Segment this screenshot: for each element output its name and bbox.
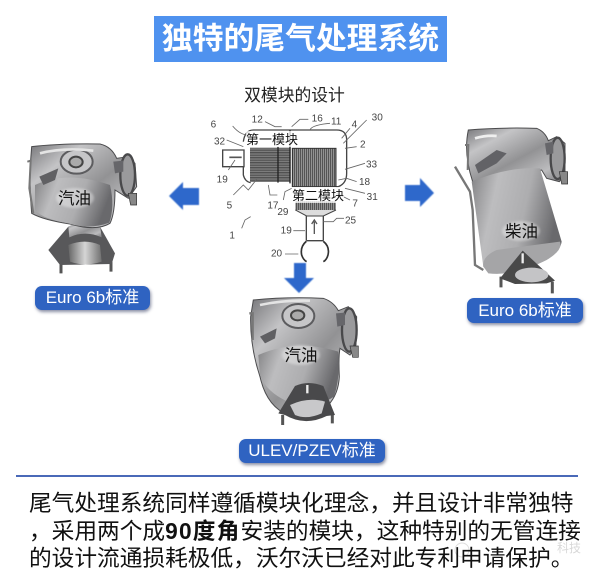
description text: 的设计流通损耗极低，沃尔沃已经对此专利申请保护。 <box>29 545 574 571</box>
arrow: right <box>405 178 434 207</box>
patent diagram: dual module design: 20 <box>271 249 283 260</box>
label: gasoline, middle: 汽油 <box>284 346 318 365</box>
patent diagram: dual module design: 16 <box>312 113 323 124</box>
patent diagram: dual module design: 33 <box>366 159 378 170</box>
patent diagram: dual module design: 12 <box>252 114 263 125</box>
patent diagram: dual module design: 11 <box>331 117 342 128</box>
watermark: 科技 <box>557 541 581 555</box>
description text: ，采用两个成90度角安装的模块，这种特别的无管连接 <box>29 518 581 544</box>
patent diagram: dual module design: 17 <box>267 200 279 211</box>
patent diagram: dual module design: 29 <box>277 207 289 218</box>
standard pill: right Euro 6b <box>467 298 583 323</box>
patent diagram: dual module design: 19 <box>281 225 292 236</box>
description text: 尾气处理系统同样遵循模块化理念，并且设计非常独特 <box>29 490 574 516</box>
label: diesel: 柴油 <box>505 222 538 241</box>
patent diagram: dual module design: 18 <box>359 177 371 188</box>
patent diagram: dual module design: 6 <box>211 120 217 131</box>
patent diagram: dual module design <box>211 112 383 262</box>
patent diagram: dual module design: 30 <box>372 112 383 123</box>
patent diagram: dual module design: 1 <box>229 231 235 242</box>
patent diagram: dual module design: 25 <box>345 216 357 227</box>
patent diagram: dual module design: 31 <box>367 192 378 203</box>
standard pill: right Euro 6b: Euro 6b标准 <box>478 301 572 320</box>
standard pill: left Euro 6b <box>35 286 150 310</box>
label: gasoline, left: 汽油 <box>58 189 91 208</box>
patent diagram: dual module design: 19 <box>217 175 228 186</box>
arrow: down <box>284 263 314 293</box>
standard pill: left Euro 6b: Euro 6b标准 <box>46 288 139 307</box>
standard pill: ULEV/PZEV: ULEV/PZEV标准 <box>248 441 376 460</box>
label: second module: 第二模块 <box>292 188 344 203</box>
watermark <box>455 541 581 557</box>
patent diagram: dual module design: 2 <box>360 140 366 151</box>
patent diagram: dual module design: 7 <box>352 199 358 210</box>
standard pill: ULEV/PZEV <box>239 439 385 463</box>
patent diagram: dual module design: 32 <box>214 136 226 147</box>
label: first module: 第一模块 <box>246 132 298 147</box>
description text <box>29 490 581 571</box>
icon: right diesel converter <box>455 128 568 293</box>
arrow: left <box>169 182 199 210</box>
title banner: 独特的尾气处理系统 <box>162 21 439 56</box>
icon: left gasoline converter <box>27 144 137 273</box>
patent diagram: dual module design: 4 <box>352 119 358 130</box>
icon: middle gasoline converter <box>249 298 358 425</box>
diagram heading: 双模块的设计 <box>244 86 345 105</box>
divider <box>16 475 578 477</box>
patent diagram: dual module design: 5 <box>227 200 233 211</box>
